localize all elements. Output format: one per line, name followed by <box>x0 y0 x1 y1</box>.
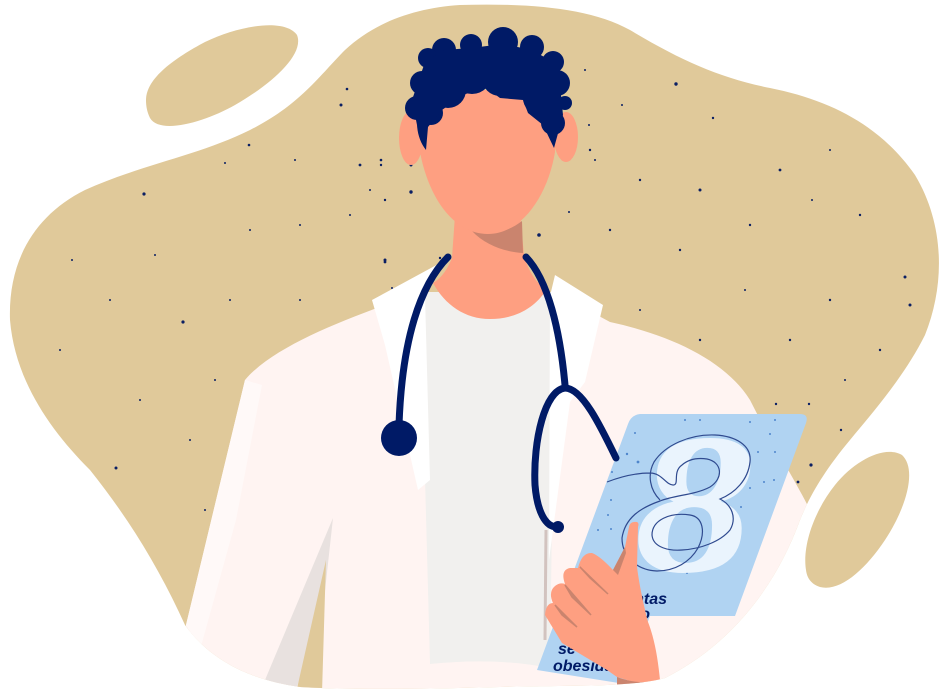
booklet <box>537 393 807 684</box>
stethoscope <box>381 257 616 533</box>
booklet speckles <box>597 419 776 574</box>
numeral swirl <box>607 435 750 571</box>
numeral 8: 8 <box>634 393 754 614</box>
arm shadow and gap <box>265 518 333 693</box>
finger creases <box>555 547 626 627</box>
coat left highlight <box>186 380 245 644</box>
neck and chest <box>433 215 546 319</box>
booklet text lower: se <box>558 641 576 658</box>
coat seam <box>545 530 546 640</box>
face <box>420 90 556 234</box>
sleeve shadow <box>617 677 644 684</box>
blob: small right <box>805 452 909 588</box>
hair <box>405 27 572 150</box>
coat collar right <box>549 275 603 560</box>
shirt <box>420 292 555 668</box>
speckles on background <box>59 69 912 511</box>
left ear <box>399 113 420 165</box>
coat body <box>180 295 810 693</box>
booklet text bottom: obesidad <box>553 658 624 675</box>
neck shadow <box>472 221 523 253</box>
coat collar left <box>372 262 442 490</box>
right ear <box>554 112 578 162</box>
booklet text line: oo <box>630 606 650 623</box>
figure clipped to blob silhouette <box>180 27 810 693</box>
blob: small top left <box>146 25 298 126</box>
booklet title text: ntas <box>634 591 667 608</box>
hand <box>545 522 660 693</box>
